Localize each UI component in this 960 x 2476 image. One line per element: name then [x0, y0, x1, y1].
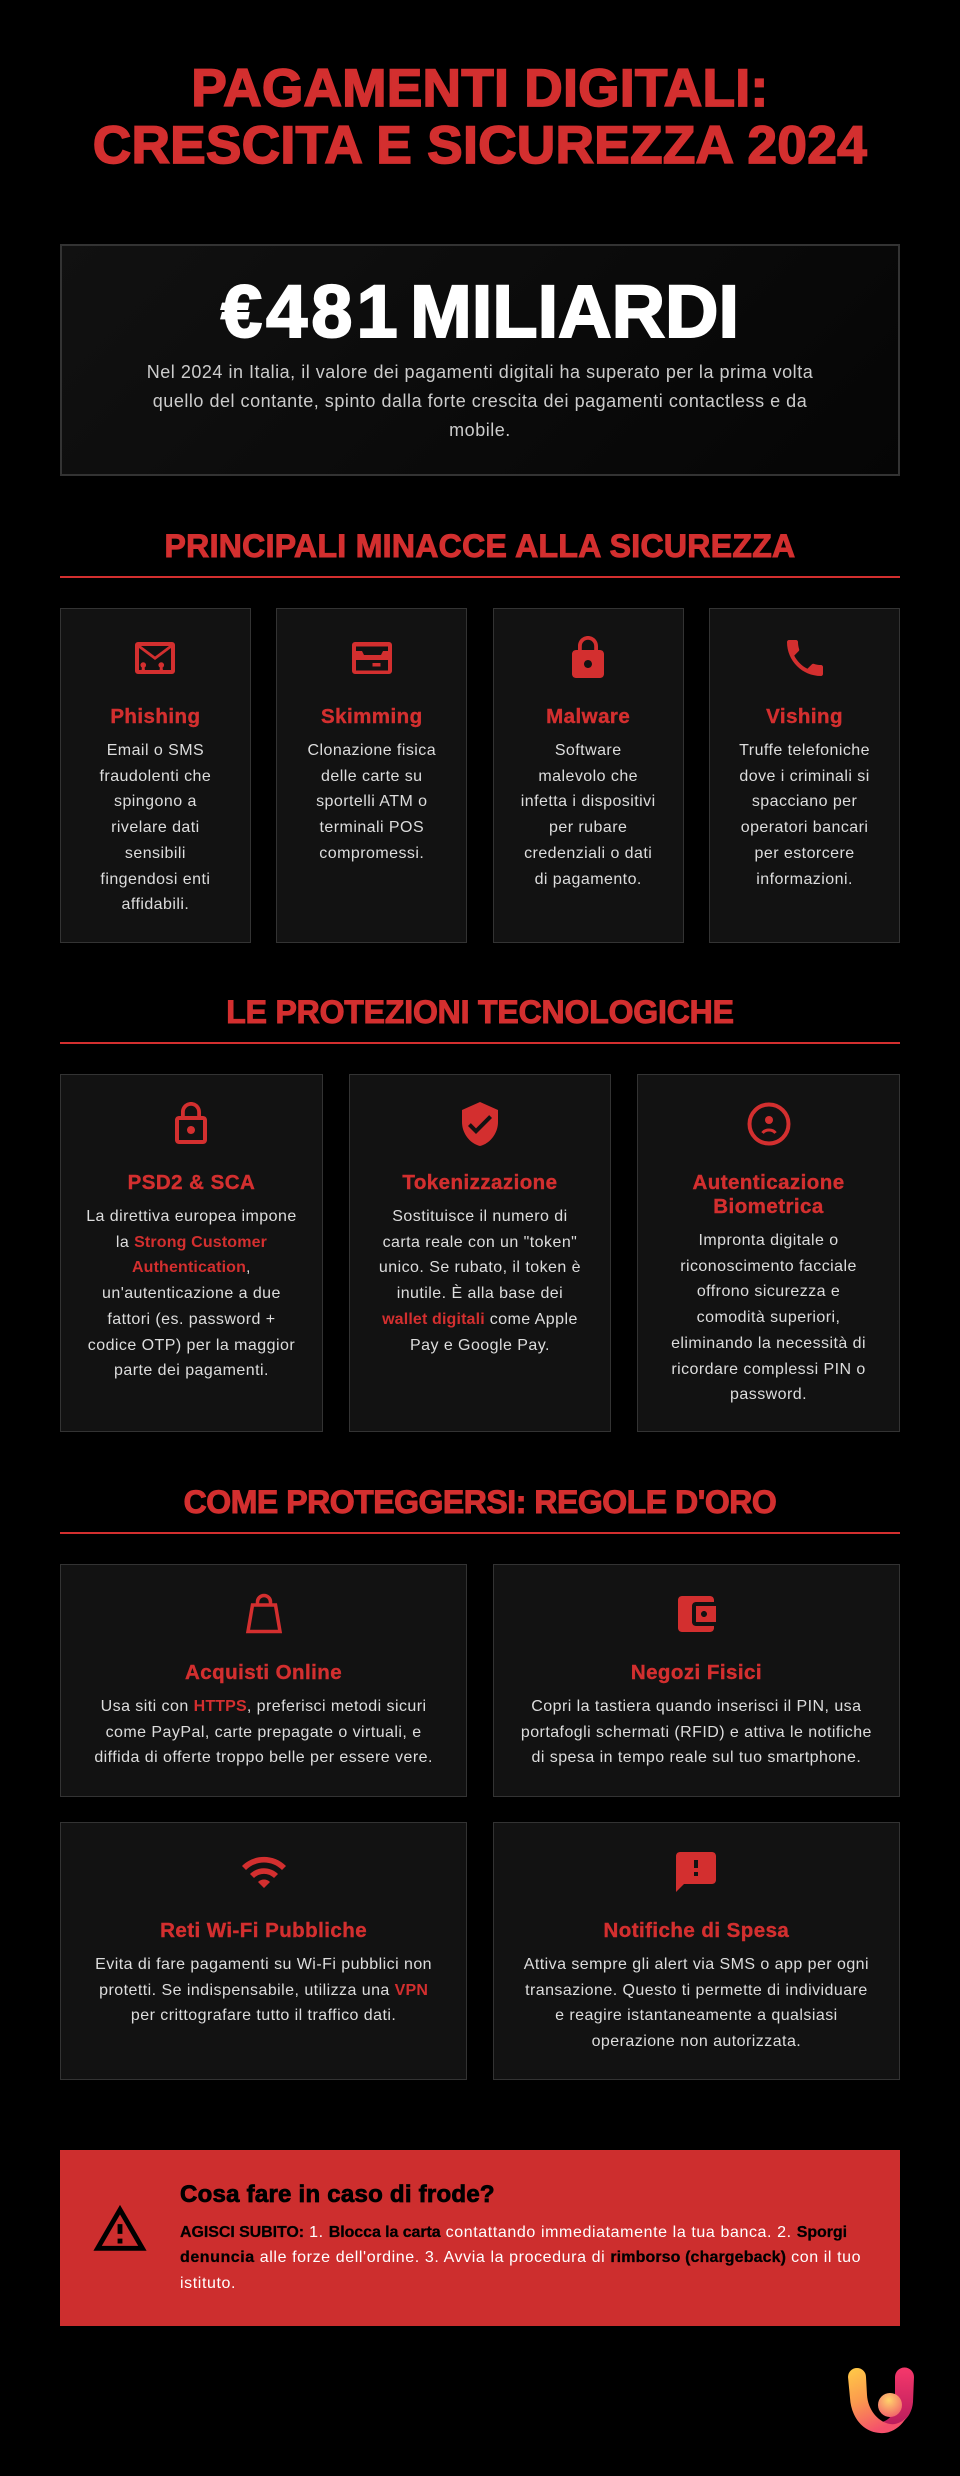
card text: Evita di fare pagamenti su Wi-Fi pubblici non	[95, 1956, 432, 1973]
card text	[739, 742, 870, 888]
panel: hero statistic	[60, 244, 900, 476]
card text: codice OTP) per la maggior	[88, 1337, 295, 1354]
card text	[100, 742, 211, 913]
panel: biometria	[637, 1074, 900, 1432]
card text: per estorcere	[755, 845, 855, 862]
card text: Impronta digitale o	[698, 1232, 839, 1249]
card text: ricordare complessi PIN o	[671, 1361, 866, 1378]
card text: informazioni.	[756, 871, 853, 888]
card text: terminali POS	[320, 819, 424, 836]
panel: notifiche di spesa	[493, 1822, 900, 2080]
card text: offrono sicurezza e	[697, 1283, 840, 1300]
card title: PSD2 & SCA	[128, 1171, 255, 1194]
card text	[524, 1956, 869, 2050]
title	[93, 59, 868, 175]
card text: fingendosi enti	[100, 871, 210, 888]
card text: di pagamento.	[535, 871, 642, 888]
card text: un'autenticazione a due	[102, 1285, 281, 1302]
card text: Truffe telefoniche	[739, 742, 870, 759]
icon: face	[748, 1102, 790, 1146]
heading: protezioni: LE PROTEZIONI TECNOLOGICHE	[226, 994, 734, 1030]
panel: reti wi-fi	[60, 1822, 467, 2080]
icon: phone	[787, 640, 823, 676]
card text: sportelli ATM o	[316, 793, 427, 810]
icon: brand logo	[848, 2368, 914, 2434]
panel: malware	[493, 608, 684, 943]
card title: Vishing	[766, 705, 843, 728]
card text: Software	[555, 742, 622, 759]
title: CRESCITA E SICUREZZA 2024	[93, 116, 867, 175]
card text: Clonazione fisica	[307, 742, 436, 759]
icon: padlock	[572, 636, 604, 678]
panel: vishing	[709, 608, 900, 943]
panel: acquisti online	[60, 1564, 467, 1797]
card text: affidabili.	[121, 896, 189, 913]
card text	[379, 1208, 581, 1354]
card text: Copri la tastiera quando inserisci il PIN, usa	[531, 1698, 861, 1715]
card title: Autenticazione	[692, 1171, 845, 1194]
icon: wifi	[242, 1856, 286, 1888]
card text: inutile. È alla base dei	[397, 1285, 563, 1302]
card text: comodità superiori,	[697, 1309, 840, 1326]
card text: malevolo che	[538, 768, 638, 785]
card text: carta reale con un "token"	[383, 1234, 577, 1251]
card text: e reagire istantaneamente a qualsiasi	[555, 2007, 838, 2024]
card text: dove i criminali si	[739, 768, 870, 785]
card text: fattori (es. password +	[107, 1311, 276, 1328]
card text: diffida di offerte troppo belle per essere vere.	[94, 1749, 433, 1766]
callout text: denuncia alle forze dell'ordine. 3. Avvia la procedura di rimborso (chargeback) con il tuo	[180, 2249, 861, 2266]
hero description: quello del contante, spinto dalla forte crescita dei pagamenti contactless e da	[153, 391, 807, 411]
card text: compromessi.	[319, 845, 424, 862]
card text: portafogli schermati (RFID) e attiva le notifiche	[521, 1724, 872, 1741]
panel: negozi fisici	[493, 1564, 900, 1797]
card text: protetti. Se indispensabile, utilizza una VPN	[99, 1982, 428, 1999]
card text: La direttiva europea impone	[86, 1208, 297, 1225]
card text: Sostituisce il numero di	[392, 1208, 568, 1225]
card text: operazione non autorizzata.	[592, 2033, 801, 2050]
callout: frode	[60, 2150, 900, 2326]
card text: Authentication,	[132, 1259, 251, 1276]
card text: operatori bancari	[741, 819, 868, 836]
card text	[86, 1208, 297, 1379]
card text: di spesa in tempo reale sul tuo smartphone.	[532, 1749, 861, 1766]
icon: shopping bag	[246, 1594, 282, 1634]
card text: parte dei pagamenti.	[114, 1362, 269, 1379]
card title: Reti Wi-Fi Pubbliche	[160, 1919, 367, 1942]
card title: Acquisti Online	[185, 1661, 342, 1684]
card title	[692, 1171, 845, 1218]
hero description: mobile.	[449, 420, 511, 440]
card text: wallet digitali come Apple	[382, 1311, 578, 1328]
panel: PSD2	[60, 1074, 323, 1432]
card text: unico. Se rubato, il token è	[379, 1259, 581, 1276]
panel: skimming	[276, 608, 467, 943]
card text	[521, 1698, 872, 1766]
card title: Biometrica	[713, 1195, 824, 1218]
card text: Pay e Google Pay.	[410, 1337, 550, 1354]
callout text	[180, 2224, 861, 2292]
heading: principali minacce: PRINCIPALI MINACCE ALLA SICUREZZA	[165, 528, 795, 564]
callout title: Cosa fare in caso di frode?	[180, 2181, 495, 2208]
icon: alert message	[676, 1852, 716, 1892]
card text: riconoscimento facciale	[680, 1258, 857, 1275]
card text: Email o SMS	[107, 742, 204, 759]
card title: Tokenizzazione	[402, 1171, 558, 1194]
icon: shield check	[462, 1102, 498, 1146]
card text: la Strong Customer	[116, 1234, 267, 1251]
card text: spingono a	[114, 793, 197, 810]
card text	[95, 1956, 432, 2024]
card text: infetta i dispositivi	[521, 793, 656, 810]
card text: rivelare dati	[111, 819, 200, 836]
hero description	[147, 362, 813, 440]
card title: Phishing	[110, 705, 200, 728]
icon: envelope	[135, 642, 175, 674]
hero description: Nel 2024 in Italia, il valore dei pagamenti digitali ha superato per la prima volta	[147, 362, 813, 382]
card text: credenziali o dati	[524, 845, 652, 862]
card text: password.	[730, 1386, 807, 1403]
card text: fraudolenti che	[100, 768, 211, 785]
card text: spacciano per	[752, 793, 857, 810]
card text: Usa siti con HTTPS, preferisci metodi sicuri	[101, 1698, 427, 1715]
card title: Skimming	[321, 705, 423, 728]
card text: eliminando la necessità di	[671, 1335, 866, 1352]
card text: per rubare	[549, 819, 627, 836]
card title: Negozi Fisici	[631, 1661, 762, 1684]
title: PAGAMENTI DIGITALI:	[191, 59, 769, 118]
card text: delle carte su	[321, 768, 423, 785]
card title: Notifiche di Spesa	[603, 1919, 789, 1942]
panel: phishing	[60, 608, 251, 943]
panel: tokenizzazione	[348, 1074, 611, 1432]
callout text: istituto.	[180, 2275, 236, 2292]
icon: warning triangle	[94, 2205, 146, 2251]
icon: card	[352, 642, 392, 674]
heading: regole d'oro: COME PROTEGGERSI: REGOLE D'ORO	[184, 1484, 776, 1520]
card text: transazione. Questo ti permette di individuare	[525, 1982, 868, 1999]
callout text: AGISCI SUBITO: 1. Blocca la carta contattando immediatamente la tua banca. 2. Sporgi	[180, 2224, 847, 2240]
card text	[94, 1698, 433, 1766]
card text	[307, 742, 436, 862]
card text: sensibili	[125, 845, 186, 862]
card text	[671, 1232, 866, 1403]
card text: come PayPal, carte prepagate o virtuali, e	[106, 1724, 422, 1741]
card text: per crittografare tutto il traffico dati.	[131, 2007, 396, 2024]
icon: wallet	[678, 1596, 716, 1632]
icon: outlined padlock	[175, 1102, 207, 1144]
card text	[521, 742, 656, 888]
hero number: €481 MILIARDI	[221, 270, 739, 353]
card text: Attiva sempre gli alert via SMS o app per ogni	[524, 1956, 869, 1973]
card title: Malware	[546, 705, 630, 728]
